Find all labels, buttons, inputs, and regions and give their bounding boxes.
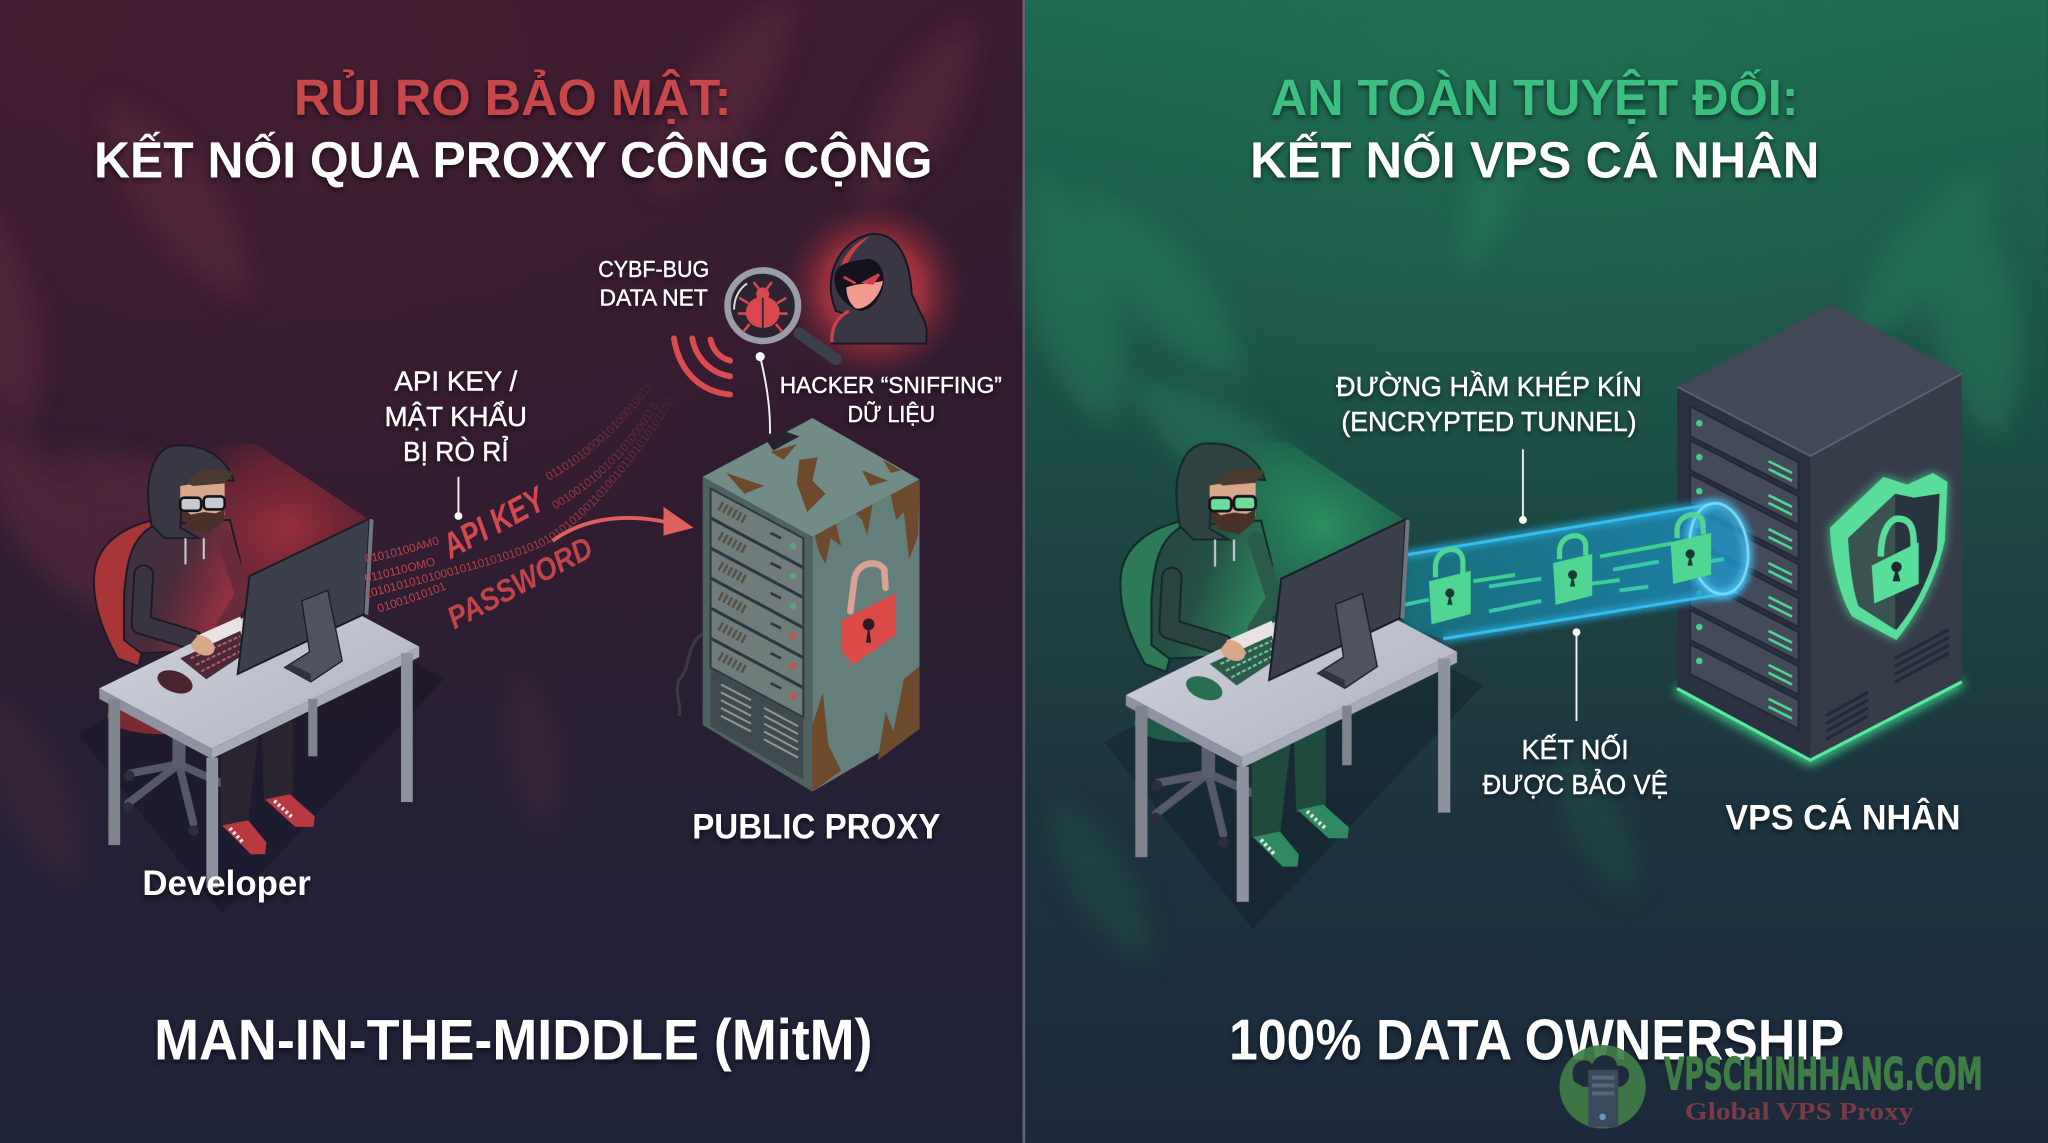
sub: lock 3 <box>1671 515 1711 584</box>
footer heading: data ownership: 100% DATA OWNERSHIP <box>1229 1008 1844 1072</box>
label: Developer: Developer <box>142 864 311 903</box>
icon: shield with lock <box>1830 473 1947 640</box>
callout: API key leak: MẬT KHẨU <box>385 401 527 432</box>
heading: right title: AN TOÀN TUYỆT ĐỐI: <box>1271 68 1799 126</box>
sub: drive bays <box>711 489 803 717</box>
data stream: leaked binary: 01010100AM0 <box>365 537 438 562</box>
sub: lock 2 <box>1553 536 1592 605</box>
callout: encrypted tunnel: (ENCRYPTED TUNNEL) <box>1341 406 1637 437</box>
icon: signal waves <box>674 338 730 395</box>
callout: protected connection: ĐƯỢC BẢO VỆ <box>1482 768 1668 800</box>
leaked label: API KEY: API KEY <box>435 479 554 567</box>
data stream: leaked binary: 0110110OMO0 <box>364 558 434 582</box>
data stream: leaked binary: 00100101001011010000110 <box>552 402 658 508</box>
data stream: leaked binary: 10101010101000101101010101010101010100110100101101010101100 <box>365 398 673 598</box>
callout: hacker sniffing: DỮ LIỆU <box>848 400 935 427</box>
illustration: private VPS server <box>1677 304 1962 760</box>
callout: protected connection <box>1482 628 1668 800</box>
callout: API key leak: API KEY / <box>394 366 518 397</box>
label: VPS ca nhan: VPS CÁ NHÂN <box>1725 797 1960 837</box>
label: cyber-bug data net: CYBF-BUG <box>598 256 709 282</box>
callout: hacker sniffing: HACKER “SNIFFING” <box>780 372 1002 398</box>
callout: API key leak <box>385 366 527 520</box>
sub: vents <box>1826 630 1949 739</box>
data stream: leaked binary: 01001010101 <box>378 582 446 612</box>
arrow: to public proxy <box>552 507 694 541</box>
sub: rack bays <box>1690 406 1799 729</box>
label: cyber-bug data net: DATA NET <box>600 285 708 311</box>
sub: lock 1 <box>1429 549 1471 624</box>
icon: hacker <box>782 199 965 381</box>
watermark: brand text <box>1664 1049 1983 1125</box>
label: public proxy: PUBLIC PROXY <box>692 808 940 847</box>
illustration: developer (VPS side) <box>1104 442 1483 929</box>
panel: right background <box>999 0 2048 1143</box>
watermark: brand text: Global VPS Proxy <box>1685 1098 1914 1125</box>
heading: right title: KẾT NỐI VPS CÁ NHÂN <box>1250 131 1819 189</box>
icon: magnifier with bug <box>728 270 836 359</box>
heading: left title: KẾT NỐI QUA PROXY CÔNG CỘNG <box>94 131 933 189</box>
data stream: leaked binary: 0110101000010100010011 <box>546 384 652 480</box>
panel: left background <box>0 0 1024 1143</box>
leaked label: PASSWORD: PASSWORD <box>441 530 599 636</box>
footer heading: MitM: MAN-IN-THE-MIDDLE (MitM) <box>154 1008 872 1072</box>
illustration: encrypted tunnel <box>1404 499 1754 639</box>
callout: hacker sniffing <box>756 352 1002 434</box>
illustration: rusty public proxy server <box>677 418 920 792</box>
callout: protected connection: KẾT NỐI <box>1522 733 1629 765</box>
heading: left title <box>94 68 933 189</box>
illustration: developer (public proxy side) <box>78 444 444 914</box>
callout: encrypted tunnel: ĐƯỜNG HẦM KHÉP KÍN <box>1336 371 1642 402</box>
heading: left title: RỦI RO BẢO MẬT: <box>294 68 731 126</box>
label: cyber-bug data net <box>598 256 709 311</box>
divider <box>1023 0 1025 1143</box>
heading: right title <box>1250 68 1819 189</box>
icon: open padlock <box>841 563 896 665</box>
sub: vent grilles <box>711 669 803 780</box>
callout: encrypted tunnel <box>1336 371 1642 524</box>
watermark: logo <box>1560 1045 1646 1129</box>
callout: API key leak: BỊ RÒ RỈ <box>403 435 509 467</box>
